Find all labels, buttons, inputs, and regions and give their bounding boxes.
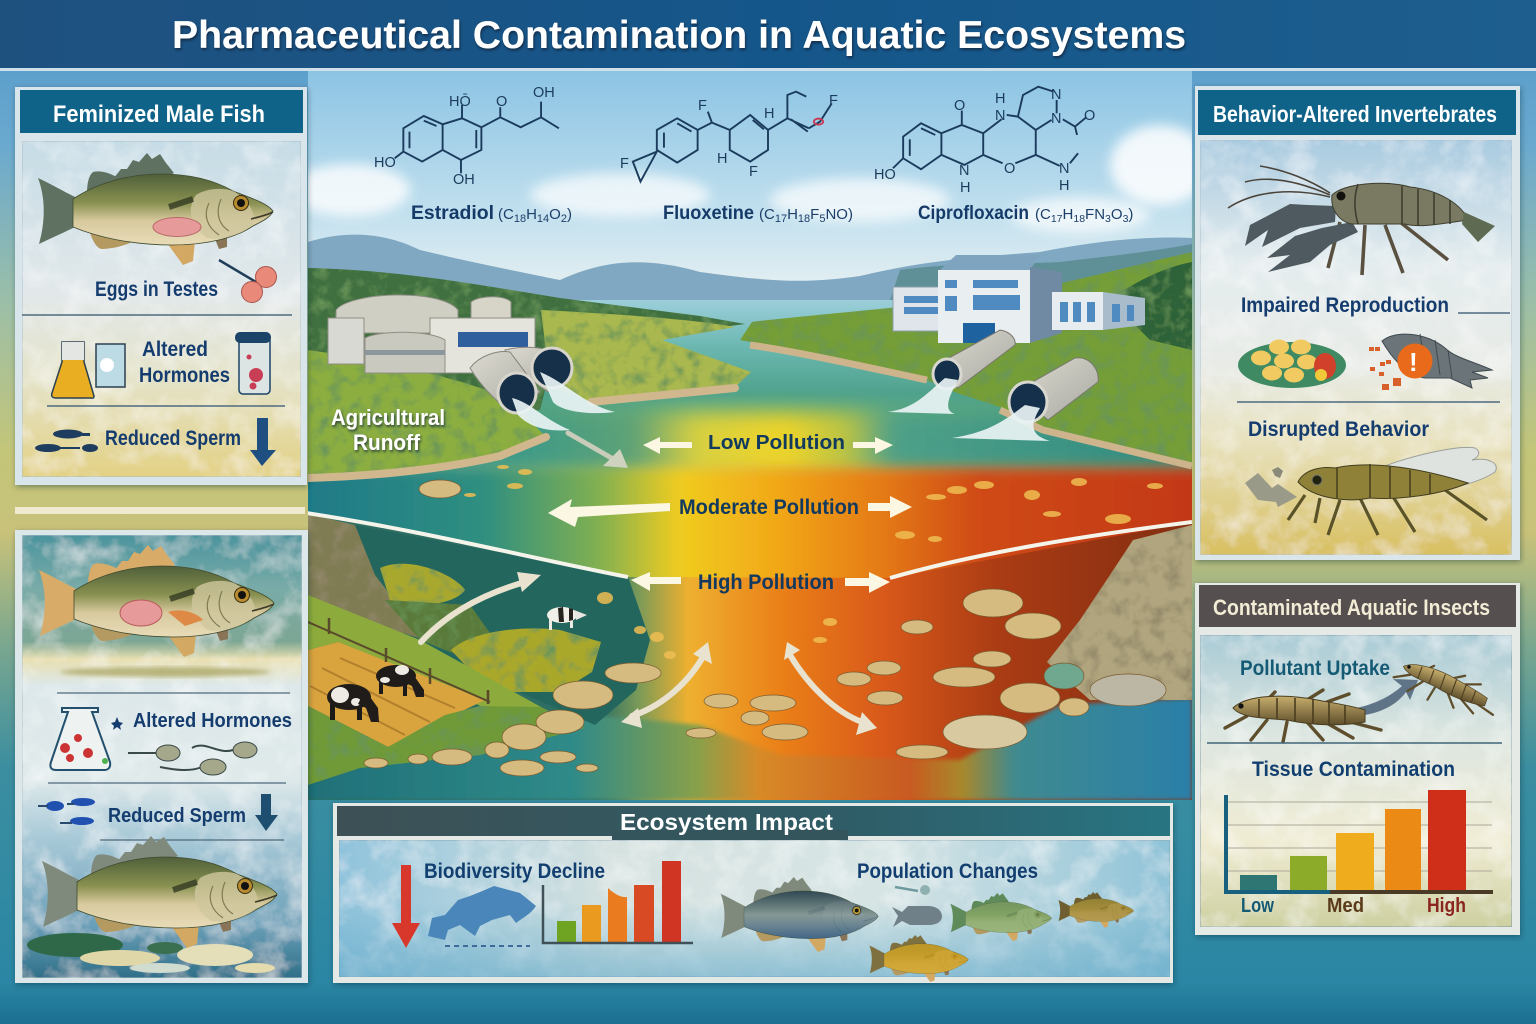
fluoxetine label: Fluoxetine [663,203,754,224]
icon: large fish [721,877,878,952]
shoreline right [750,345,1192,466]
bar chart: tissue contamination: High [1427,895,1466,917]
mountains [308,234,1192,300]
icon: bass lower [42,836,277,948]
molecule: ciprofloxacin: N [995,108,1005,124]
waterline [300,512,1192,578]
molecule: estradiol: HŌ [449,94,471,110]
title: Pharmaceutical Contamination in Aquatic Ecosystems [172,14,1186,57]
bar chart: tissue contamination: Med [1327,895,1364,917]
text: impaired reproduction: Impaired Reproduction [1241,294,1449,317]
estradiol formula: 2 [561,213,567,225]
icon: sperm small [38,798,95,825]
molecule: fluoxetine: H [717,151,727,167]
panel heading bar: Feminized Male Fish [53,101,265,128]
molecule: ciprofloxacin: N [1051,87,1061,103]
text: disrupted behavior: Disrupted Behavior [1248,418,1429,441]
icon: green fish [950,893,1051,941]
estradiol formula: O [549,206,561,223]
right rocky cliff [1047,525,1192,700]
text: biodiversity decline: Biodiversity Decline [424,860,605,883]
fluoxetine formula: 18 [798,213,810,225]
icon: hormone flask [50,708,110,770]
left treatment plant [328,295,535,373]
lower polluted river band [308,459,1192,578]
decorative separator line [15,507,305,514]
ciprofloxacin formula: 18 [1073,213,1085,225]
molecule: estradiol: O [496,94,507,110]
dark forest right [1118,262,1192,350]
fluoxetine formula: 17 [775,213,787,225]
icon: star [111,717,123,730]
curved arrows [421,433,877,735]
panel: behavior-altered invertebrates [1195,86,1520,560]
estradiol formula: (C [498,206,514,223]
right outflow water [888,378,1050,441]
panel: contaminated aquatic insects [1195,583,1520,935]
icon: fading fish [428,886,536,946]
molecule: fluoxetine: F [749,164,758,180]
icon: invertebrate with warning [1369,334,1492,390]
cows [327,607,587,722]
molecule: ciprofloxacin: N [1051,111,1061,127]
agricultural runoff label: Runoff [353,430,421,455]
panel: ecosystem impact [333,803,1173,983]
icon: down arrow lower [255,794,278,831]
estradiol formula: 14 [537,213,549,225]
ciprofloxacin formula: 17 [1051,213,1063,225]
molecule: estradiol: OH [533,85,555,101]
text: reduced sperm: Reduced Sperm [105,427,241,450]
estradiol formula: ) [567,206,572,223]
molecule: ciprofloxacin: H [1059,178,1069,194]
icon: sample vial [235,332,271,394]
pollution level labels: Low Pollution [708,431,845,454]
molecule: ciprofloxacin: N [1059,161,1069,177]
agricultural runoff label: Agricultural [331,405,445,430]
icon: small grey fish [892,885,942,927]
cow small [547,607,587,630]
bar chart: tissue contamination [1226,790,1493,917]
far meadow left [541,310,751,402]
molecule: ciprofloxacin [874,87,1095,224]
fluoxetine formula: 5 [819,213,825,225]
molecule: fluoxetine: H [764,106,774,122]
panel: fish lower left [15,530,308,983]
icon: sperm [35,430,98,452]
left outflow pipes [470,347,572,413]
forest and bank right [740,252,1192,465]
text: altered hormones lower: Altered Hormones [133,709,292,732]
left outflow water [512,372,615,430]
icon: golden fish [869,935,968,982]
riverbed stones [364,480,1166,776]
ciprofloxacin formula: (C [1035,206,1051,223]
molecule: ciprofloxacin: H [995,91,1005,107]
pollution level labels: Moderate Pollution [679,496,859,519]
panel heading bar: Ecosystem Impact [620,809,833,835]
cow back [376,665,424,697]
fluoxetine formula: NO) [825,206,853,223]
icon: down arrow [250,418,276,466]
molecule: ciprofloxacin: O [954,98,965,114]
estradiol formula: H [526,206,537,223]
estradiol formula: 18 [514,213,526,225]
title bar [0,0,1536,71]
text: population changes: Population Changes [857,860,1038,883]
molecule: estradiol: HO [374,155,396,171]
molecule: ciprofloxacin: HO [874,167,896,183]
central river scene [308,71,1192,800]
shore band lower [27,933,275,973]
cow front [327,684,379,722]
molecule: fluoxetine: F [829,93,838,109]
panel heading bar [1199,585,1516,627]
sky with clouds [308,71,1192,281]
left bank [308,350,546,482]
bar chart: tissue contamination: Low [1241,895,1274,917]
ciprofloxacin formula: FN [1085,206,1105,223]
ciprofloxacin formula: ) [1128,206,1133,223]
agricultural runoff label [331,405,445,455]
icon: crayfish [1228,166,1495,275]
icon: invertebrate with warning: ! [1409,347,1418,377]
ciprofloxacin formula: 3 [1105,213,1111,225]
bar chart: biodiversity [543,861,693,943]
icon: bass with eggs [38,153,273,265]
contaminated water section [308,512,1192,800]
farm bank with field [308,514,650,785]
bottom river water [308,698,1192,800]
fluoxetine formula: F [810,206,819,223]
pollution level labels [548,431,912,594]
molecule: ciprofloxacin: O [1004,161,1015,177]
middle river band [418,396,1192,475]
panel heading bar [1198,90,1516,135]
shoreline left [308,388,735,478]
icon: uptake arrow [1357,679,1418,716]
molecule: fluoxetine: F [620,156,629,172]
text: reduced sperm lower: Reduced Sperm [108,804,246,827]
ciprofloxacin label: Ciprofloxacin [918,203,1029,224]
molecule: ciprofloxacin: H [960,180,970,196]
small debris [464,465,1163,659]
text: tissue contamination: Tissue Contamination [1252,758,1455,781]
text: pollutant uptake: Pollutant Uptake [1240,657,1390,680]
panel heading bar [337,806,1170,840]
panel heading bar [20,90,303,133]
icon: insect lower [1225,690,1381,742]
estradiol label: Estradiol [411,203,494,224]
molecule: estradiol: OH [453,172,475,188]
text: altered hormones: Altered [142,338,208,361]
text: altered hormones: Hormones [139,364,230,387]
fluoxetine formula: (C [759,206,775,223]
molecule: ciprofloxacin: O [1084,108,1095,124]
text: altered hormones [139,338,230,387]
text: eggs in testes: Eggs in Testes [95,278,218,301]
icon: eggs on leaf [1238,340,1346,388]
right factory building [893,255,1145,343]
icon: eggs pointer [219,260,276,302]
molecule: ciprofloxacin: N [959,163,969,179]
pollution level labels: High Pollution [698,571,834,594]
icon: sperm trio [128,742,257,775]
forest behind plant left [308,268,745,420]
right outflow pipes [933,330,1098,422]
upper river [536,300,1008,425]
ciprofloxacin formula: O [1111,206,1123,223]
icon: bass with eggs upper [39,545,274,657]
panel: feminized male fish [15,87,307,485]
panel heading bar: Contaminated Aquatic Insects [1213,595,1490,620]
icon: olive fish [1058,892,1134,928]
fluoxetine formula: H [787,206,798,223]
ciprofloxacin formula: H [1063,206,1073,223]
icon: insect upper [1390,653,1502,722]
molecule: fluoxetine [620,92,838,224]
icon: flask and beaker [52,342,125,398]
molecule: fluoxetine: F [698,98,707,114]
icon: insect with wings [1245,447,1496,535]
icon: red down arrow [392,865,420,948]
molecule: estradiol [374,85,559,224]
bush band [60,667,270,677]
ciprofloxacin formula: 3 [1123,213,1129,225]
